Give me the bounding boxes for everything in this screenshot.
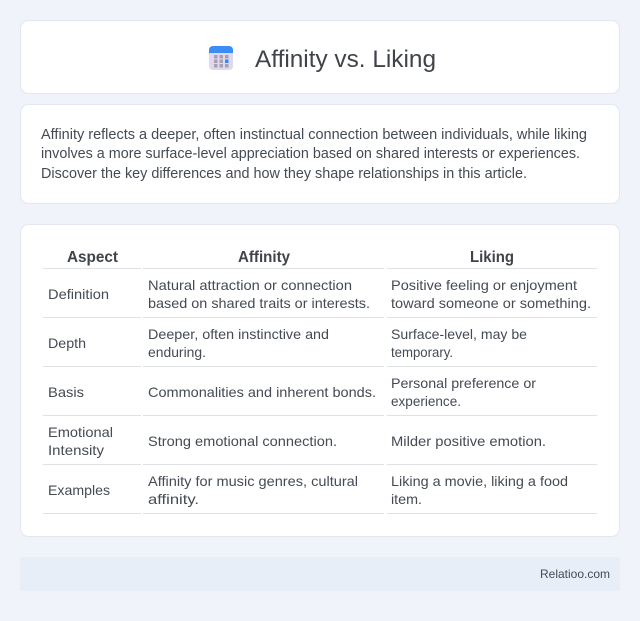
row: basis: experience. — [391, 393, 461, 409]
row: examples: Affinity for music genres, cultural — [148, 473, 358, 489]
row: emotional intensity: Milder positive emotion. — [391, 433, 546, 449]
title: Affinity vs. Liking — [255, 46, 436, 73]
row: definition: based on shared traits or interests. — [148, 295, 370, 311]
row: basis: Personal preference or — [391, 375, 536, 391]
icon: calendar — [209, 46, 233, 70]
text block: introduction: involves a more surface-level appreciation based on shared interests or experiences. — [41, 146, 580, 162]
row: emotional intensity: Emotional — [48, 424, 113, 440]
row: depth: Surface-level, may be — [391, 326, 527, 342]
row: definition: Definition — [48, 286, 109, 302]
text block: introduction: Discover the key differences and how they shape relationships in this article. — [41, 166, 527, 182]
text block: introduction — [41, 127, 587, 182]
text block: introduction: Affinity reflects a deeper, often instinctual connection between individuals, while liking — [41, 127, 587, 143]
row: emotional intensity — [48, 424, 546, 458]
row: examples: Liking a movie, liking a food — [391, 473, 568, 489]
row: examples: item. — [391, 491, 422, 507]
row: depth: Depth — [48, 335, 86, 351]
row: basis: Commonalities and inherent bonds. — [148, 384, 376, 400]
table header: Liking — [470, 249, 514, 266]
row: basis — [48, 375, 536, 409]
table header: Aspect — [67, 249, 119, 266]
panel: introduction — [20, 104, 620, 204]
row: examples: affinity. — [148, 491, 199, 507]
row: depth — [48, 326, 527, 360]
row: definition — [48, 277, 591, 311]
row: depth: enduring. — [148, 344, 206, 360]
row: basis: Basis — [48, 384, 84, 400]
footer: Relatioo.com — [540, 567, 610, 581]
row: definition: toward someone or something. — [391, 295, 591, 311]
panel: header — [20, 20, 620, 94]
panel: comparison table — [20, 224, 620, 536]
row: depth: temporary. — [391, 344, 453, 360]
row: depth: Deeper, often instinctive and — [148, 326, 329, 342]
row: definition: Natural attraction or connection — [148, 277, 352, 293]
row: emotional intensity: Intensity — [48, 442, 104, 458]
table header — [67, 249, 514, 266]
table header: Affinity — [238, 249, 290, 266]
row: definition: Positive feeling or enjoyment — [391, 277, 577, 293]
row: emotional intensity: Strong emotional connection. — [148, 433, 337, 449]
row: examples: Examples — [48, 482, 110, 498]
row: examples — [48, 473, 568, 507]
footer — [20, 557, 620, 591]
